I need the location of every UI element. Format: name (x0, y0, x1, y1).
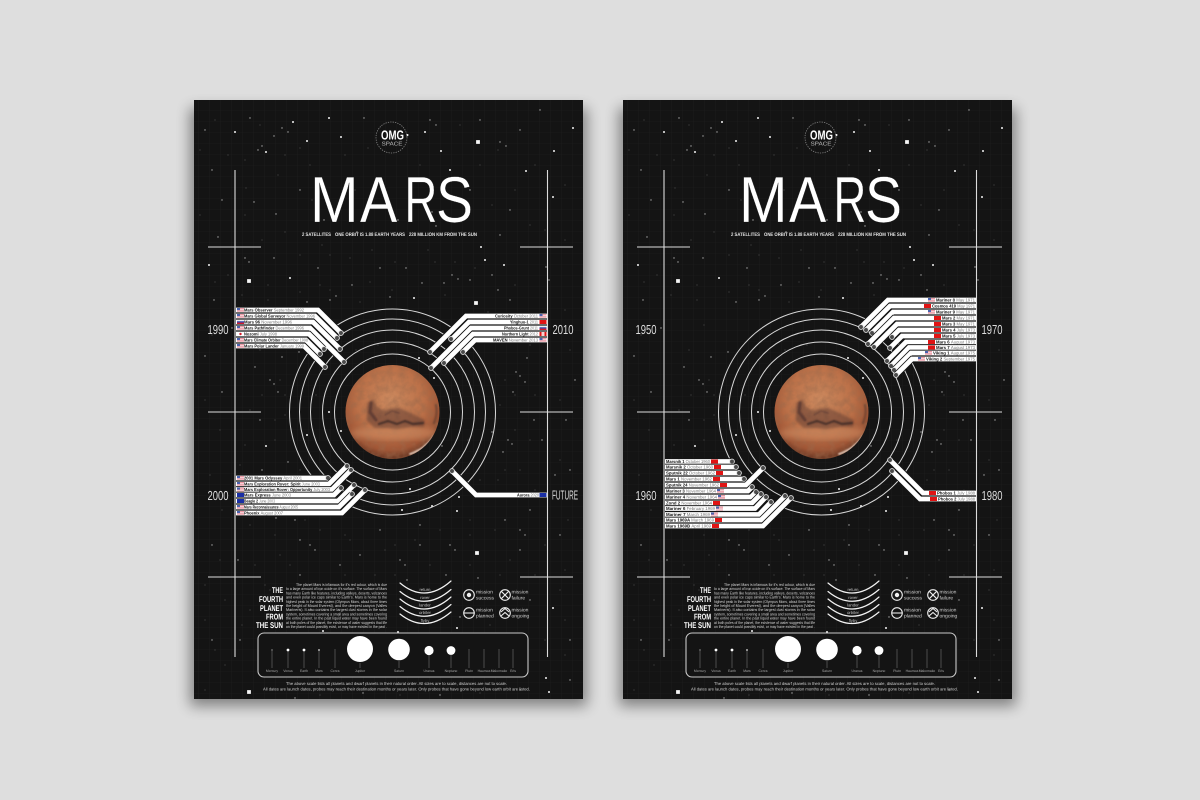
icon: mission ongoing: mission (512, 608, 529, 614)
solar system scale panel: Neptune (445, 669, 458, 673)
footnote: All dates are launch dates, probes may reach their destination months or years later. Only probes that have gone beyond low earth orbit are listed. (691, 686, 958, 692)
side heading: PLANET (260, 603, 284, 613)
solar system scale panel: Saturn (822, 669, 832, 673)
mission: Mariner 3: Mariner 3 November 1964 (666, 489, 717, 494)
mission: Mars 4: Mars 4 July 1973 (942, 328, 976, 333)
paragraph: The planet Mars is infamous for it's red colour, which is due (296, 582, 388, 587)
mission: Mars 5: Mars 5 July 1973 (942, 334, 976, 339)
paragraph: system, sometimes covering a small area and sometimes covering (714, 611, 815, 616)
icon: mission planned: mission (904, 608, 921, 614)
icon: mission ongoing: mission (940, 608, 957, 614)
solar system scale panel: Makemake (919, 669, 935, 673)
poster 2: Mars missions 1950 to 1980 (619, 100, 1016, 706)
paragraph: the height of Mount Everest), and the deepest canyon (Valles (714, 603, 815, 608)
orbit type legend: lander (847, 602, 859, 608)
year labels (208, 322, 578, 503)
orbit type legend: orbiter (847, 610, 860, 615)
side heading: FROM (266, 612, 283, 622)
mission: Northern Light: Northern Light 2012 (502, 332, 539, 337)
title: M (739, 163, 788, 236)
footnote: The above scale lists all planets and dwarf planets in their natural order. All sizes are to scale, distances are not to scale. (714, 681, 935, 686)
title (310, 163, 473, 236)
orbit type legend: rover (420, 595, 430, 600)
year labels: 1970 (982, 322, 1002, 337)
side heading: FOURTH (687, 594, 711, 604)
mission: Cosmos 419: Cosmos 419 May 1971 (932, 304, 976, 309)
paragraph: at both poles of the planet, the existence of water suggests that life (286, 620, 388, 625)
orbit type legend: flyby (849, 618, 858, 623)
missions: 2010s (428, 314, 547, 370)
solar system scale panel: Mars (315, 669, 323, 673)
logo (805, 122, 838, 153)
logo: SPACE (382, 142, 403, 148)
solar system scale panel: Venus (711, 669, 721, 673)
orbit type legend: flyby (421, 618, 430, 623)
poster 1: Mars missions 1990 to future: FUTURE (552, 488, 578, 502)
poster 1: Mars missions 1990 to future (190, 100, 587, 706)
icon: mission ongoing: ongoing (940, 614, 958, 620)
orbit type legend: orbiter (419, 610, 432, 615)
mission: Mars Climate Orbiter: Mars Climate Orbiter December 1998 (244, 338, 309, 343)
solar system scale panel: Haumea (478, 669, 491, 673)
side heading: PLANET (688, 603, 712, 613)
mission: Mars Observer: Mars Observer September 1992 (244, 308, 305, 313)
mission: Curiosity: Curiosity October 2011 (495, 314, 539, 319)
timeline frame (637, 170, 1002, 657)
planet Mars (774, 365, 871, 459)
icon: mission planned: mission (476, 608, 493, 614)
icon: mission success: success (476, 596, 495, 602)
footnote (263, 681, 530, 692)
solar system scale panel: Ceres (330, 669, 340, 673)
icon: mission ongoing (500, 608, 530, 620)
footnote (691, 681, 958, 692)
year labels: 1980 (982, 488, 1002, 503)
paragraph: on the planet could possibly exist, or may have existed in the past . (714, 624, 815, 629)
solar system scale panel: Mercury (266, 669, 278, 673)
paragraph: The planet Mars is infamous for it's red colour, which is due (724, 582, 816, 587)
year labels: 2010 (552, 322, 574, 337)
logo: OMG (810, 128, 833, 142)
year labels: 1960 (636, 488, 656, 503)
paragraph: the entire planet. In the past liquid water may have been found (714, 616, 815, 621)
subtitle facts: 2 SATELLITES (731, 232, 761, 238)
mission: Aurora (450, 469, 547, 498)
solar system scale panel: Haumea (906, 669, 919, 673)
title: R (404, 163, 437, 236)
title: R (833, 163, 866, 236)
missions: 1980s (888, 458, 976, 502)
paragraph: has many Earth like features, including valleys, deserts, volcanoes (286, 590, 387, 595)
mission: Viking 2: Viking 2 September 1975 (926, 357, 976, 362)
paragraph: Marineris). It also contains the largest dust storms in the solar (714, 607, 816, 612)
orbit rings (290, 309, 496, 515)
icon: mission success: mission (904, 590, 921, 596)
paragraph: highest peak in the solar system (Olympus Mons, about three times (286, 599, 387, 604)
mission: Phobos 1: Phobos 1 July 1988 (937, 491, 976, 496)
icon: mission failure: mission (512, 590, 529, 596)
mission: Mars 3: Mars 3 May 1971 (942, 322, 976, 327)
year labels: 1950 (636, 322, 656, 337)
side heading (684, 585, 712, 630)
solar system scale panel: Earth (300, 669, 308, 673)
mission: 2001 Mars Odyssey: 2001 Mars Odyssey April 2001 (244, 476, 303, 481)
paragraph: the height of Mount Everest), and the deepest canyon (Valles (286, 603, 387, 608)
icon: mission success: success (904, 596, 923, 602)
paragraph: has many Earth like features, including valleys, deserts, volcanoes (714, 590, 815, 595)
title (739, 163, 902, 236)
solar system scale panel: Saturn (394, 669, 404, 673)
paragraph: highest peak in the solar system (Olympus Mons, about three times (714, 599, 815, 604)
solar system scale panel: Eris (938, 669, 944, 673)
mission: Mars Express: Mars Express June 2003 (244, 493, 292, 498)
paragraph: to a large amount of iron oxide on it's surface. The surface of Mars (286, 586, 387, 591)
subtitle facts (302, 232, 477, 238)
title: A (360, 163, 398, 236)
orbit rings (718, 309, 924, 515)
solar system scale panel: Jupiter (783, 669, 794, 673)
icon: mission planned: planned (476, 614, 494, 620)
paragraph: on the planet could possibly exist, or may have existed in the past . (286, 624, 387, 629)
mission: Mariner 8: Mariner 8 May 1971 (936, 298, 976, 303)
icon: mission failure (928, 590, 957, 602)
title: S (865, 163, 902, 236)
solar system scale panel: Venus (283, 669, 293, 673)
mission: Viking 1: Viking 1 August 1975 (933, 351, 976, 356)
missions: 1970s (859, 298, 976, 377)
mission: Mars Reconnaissance: Mars Reconnaissance August 2005 (244, 505, 298, 510)
logo (376, 122, 408, 153)
mission: Mars 96: Mars 96 November 1996 (244, 320, 293, 325)
mission: Mariner 4: Mariner 4 November 1964 (666, 495, 718, 500)
paragraph: system, sometimes covering a small area and sometimes covering (286, 611, 387, 616)
mission: Yinghuo-1: Yinghuo-1 2011 (510, 320, 539, 325)
solar system scale panel: Makemake (491, 669, 507, 673)
mission: Mariner 9: Mariner 9 May 1971 (936, 310, 976, 315)
solar system scale panel: Uranus (424, 669, 435, 673)
paragraph (714, 582, 816, 629)
mission: Sputnik 24: Sputnik 24 November 1962 (666, 483, 720, 488)
icon: mission planned: planned (904, 614, 922, 620)
timeline frame (208, 170, 573, 657)
mission status legend (892, 590, 958, 620)
mission: Mars 7: Mars 7 August 1973 (936, 345, 976, 350)
orbit type legend: lander (419, 602, 431, 608)
mission: Nozomi: Nozomi July 1998 (244, 332, 278, 337)
solar system scale panel: Ceres (758, 669, 768, 673)
paragraph: and even polar ice caps similar to Earth's. Mars is home to the (714, 595, 816, 600)
subtitle facts: 228 MILLION KM FROM THE SUN (838, 232, 906, 238)
icon: mission planned (464, 608, 494, 620)
mission: Mars Global Surveyor: Mars Global Surveyor November 1996 (244, 314, 316, 319)
mission: Opportunity: Mars Exploration Rover: Opportunity July 2003 (244, 487, 331, 492)
side heading: THE (272, 585, 283, 595)
mission: Marsnik 2: Marsnik 2 October 1960 (666, 465, 714, 470)
icon: mission failure (500, 590, 529, 602)
subtitle facts: ONE ORBIT IS 1.88 EARTH YEARS (335, 232, 406, 238)
missions: 1990s (236, 308, 346, 369)
orbit type legend: rover (848, 595, 858, 600)
subtitle facts: ONE ORBIT IS 1.88 EARTH YEARS (764, 232, 835, 238)
orbit type legend (828, 581, 879, 624)
planet Mars (345, 365, 442, 459)
footnote: All dates are launch dates, probes may reach their destination months or years later. Only probes that have gone beyond low earth orbit are listed. (263, 686, 530, 692)
paragraph: at both poles of the planet, the existence of water suggests that life (714, 620, 816, 625)
paragraph: to a large amount of iron oxide on it's surface. The surface of Mars (714, 586, 815, 591)
solar system scale panel: Earth (728, 669, 736, 673)
side heading: FROM (694, 612, 711, 622)
solar system scale panel: Neptune (873, 669, 886, 673)
subtitle facts: 228 MILLION KM FROM THE SUN (409, 232, 477, 238)
mission: Spirit: Mars Exploration Rover: Spirit June 2003 (244, 482, 321, 487)
mission: Mars 1969A: Mars 1969A March 1969 (666, 518, 715, 523)
icon: mission success (892, 590, 923, 602)
side heading: FOURTH (259, 594, 283, 604)
solar system scale panel: Jupiter (355, 669, 366, 673)
paragraph: Marineris). It also contains the largest dust storms in the solar (286, 607, 388, 612)
mission: Phoenix: Phoenix August 2007 (244, 511, 284, 516)
mission: Mars 1: Mars 1 November 1962 (666, 477, 713, 482)
year labels: 1990 (208, 322, 228, 337)
logo: OMG (381, 128, 404, 142)
year labels (636, 322, 1002, 503)
paragraph: the entire planet. In the past liquid water may have been found (286, 616, 387, 621)
title: A (789, 163, 827, 236)
mission: MAVEN: MAVEN November 2013 (493, 338, 539, 343)
mission: Beagle 2: Beagle 2 June 2003 (244, 499, 275, 504)
solar system scale panel: Pluto (465, 669, 473, 673)
solar system scale panel: Pluto (893, 669, 901, 673)
solar system scale panel (258, 633, 528, 677)
icon: mission success (464, 590, 495, 602)
solar system scale panel: Eris (510, 669, 516, 673)
title: M (310, 163, 359, 236)
side heading: THE SUN (684, 620, 711, 630)
year labels: 2000 (208, 488, 228, 503)
orbit type legend: return (420, 587, 431, 592)
logo: SPACE (810, 142, 832, 148)
icon: mission failure: mission (940, 590, 957, 596)
icon: mission success: mission (476, 590, 493, 596)
mission: Mariner 7: Mariner 7 March 1969 (666, 512, 711, 517)
mission: Aurora: Aurora 2020 (517, 493, 540, 498)
solar system scale panel (686, 633, 956, 677)
missions: 1960s (665, 459, 793, 529)
mission: Mars Polar Lander: Mars Polar Lander January 1999 (244, 344, 305, 349)
side heading: THE SUN (256, 620, 283, 630)
footnote: The above scale lists all planets and dwarf planets in their natural order. All sizes are to scale, distances are not to scale. (286, 681, 507, 686)
solar system scale panel: Mercury (694, 669, 706, 673)
icon: mission ongoing: ongoing (512, 614, 530, 620)
side heading: THE (700, 585, 711, 595)
mission: Mars 6: Mars 6 August 1973 (936, 340, 976, 345)
mission: Marsnik 1: Marsnik 1 October 1960 (666, 459, 711, 464)
icon: mission failure: failure (512, 596, 525, 602)
orbit type legend: return (848, 587, 859, 592)
mission: Phobos-Grunt: Phobos-Grunt 2011 (504, 326, 539, 331)
paragraph (286, 582, 388, 629)
mission status legend (464, 590, 530, 620)
icon: mission failure: failure (940, 596, 953, 602)
icon: mission ongoing (928, 608, 958, 620)
mission: Mars Pathfinder: Mars Pathfinder December 1996 (244, 326, 305, 331)
solar system scale panel: Mars (743, 669, 751, 673)
orbit type legend (400, 581, 451, 624)
subtitle facts (731, 232, 906, 238)
solar system scale panel: Uranus (852, 669, 863, 673)
icon: mission planned (892, 608, 922, 620)
title: S (436, 163, 473, 236)
mission: Mars 1969B: Mars 1969B April 1969 (666, 524, 712, 529)
missions: 2000s (236, 464, 367, 516)
mission: Mariner 6: Mariner 6 February 1969 (666, 506, 716, 511)
mission: Phobos 2: Phobos 2 July 1988 (938, 497, 976, 502)
mission: Zond 2: Zond 2 November 1964 (666, 501, 713, 506)
mission: Mars 2: Mars 2 May 1971 (942, 316, 976, 321)
subtitle facts: 2 SATELLITES (302, 232, 332, 238)
mission: Sputnik 22: Sputnik 22 October 1962 (666, 471, 716, 476)
side heading (256, 585, 284, 630)
paragraph: and even polar ice caps similar to Earth's. Mars is home to the (286, 595, 388, 600)
